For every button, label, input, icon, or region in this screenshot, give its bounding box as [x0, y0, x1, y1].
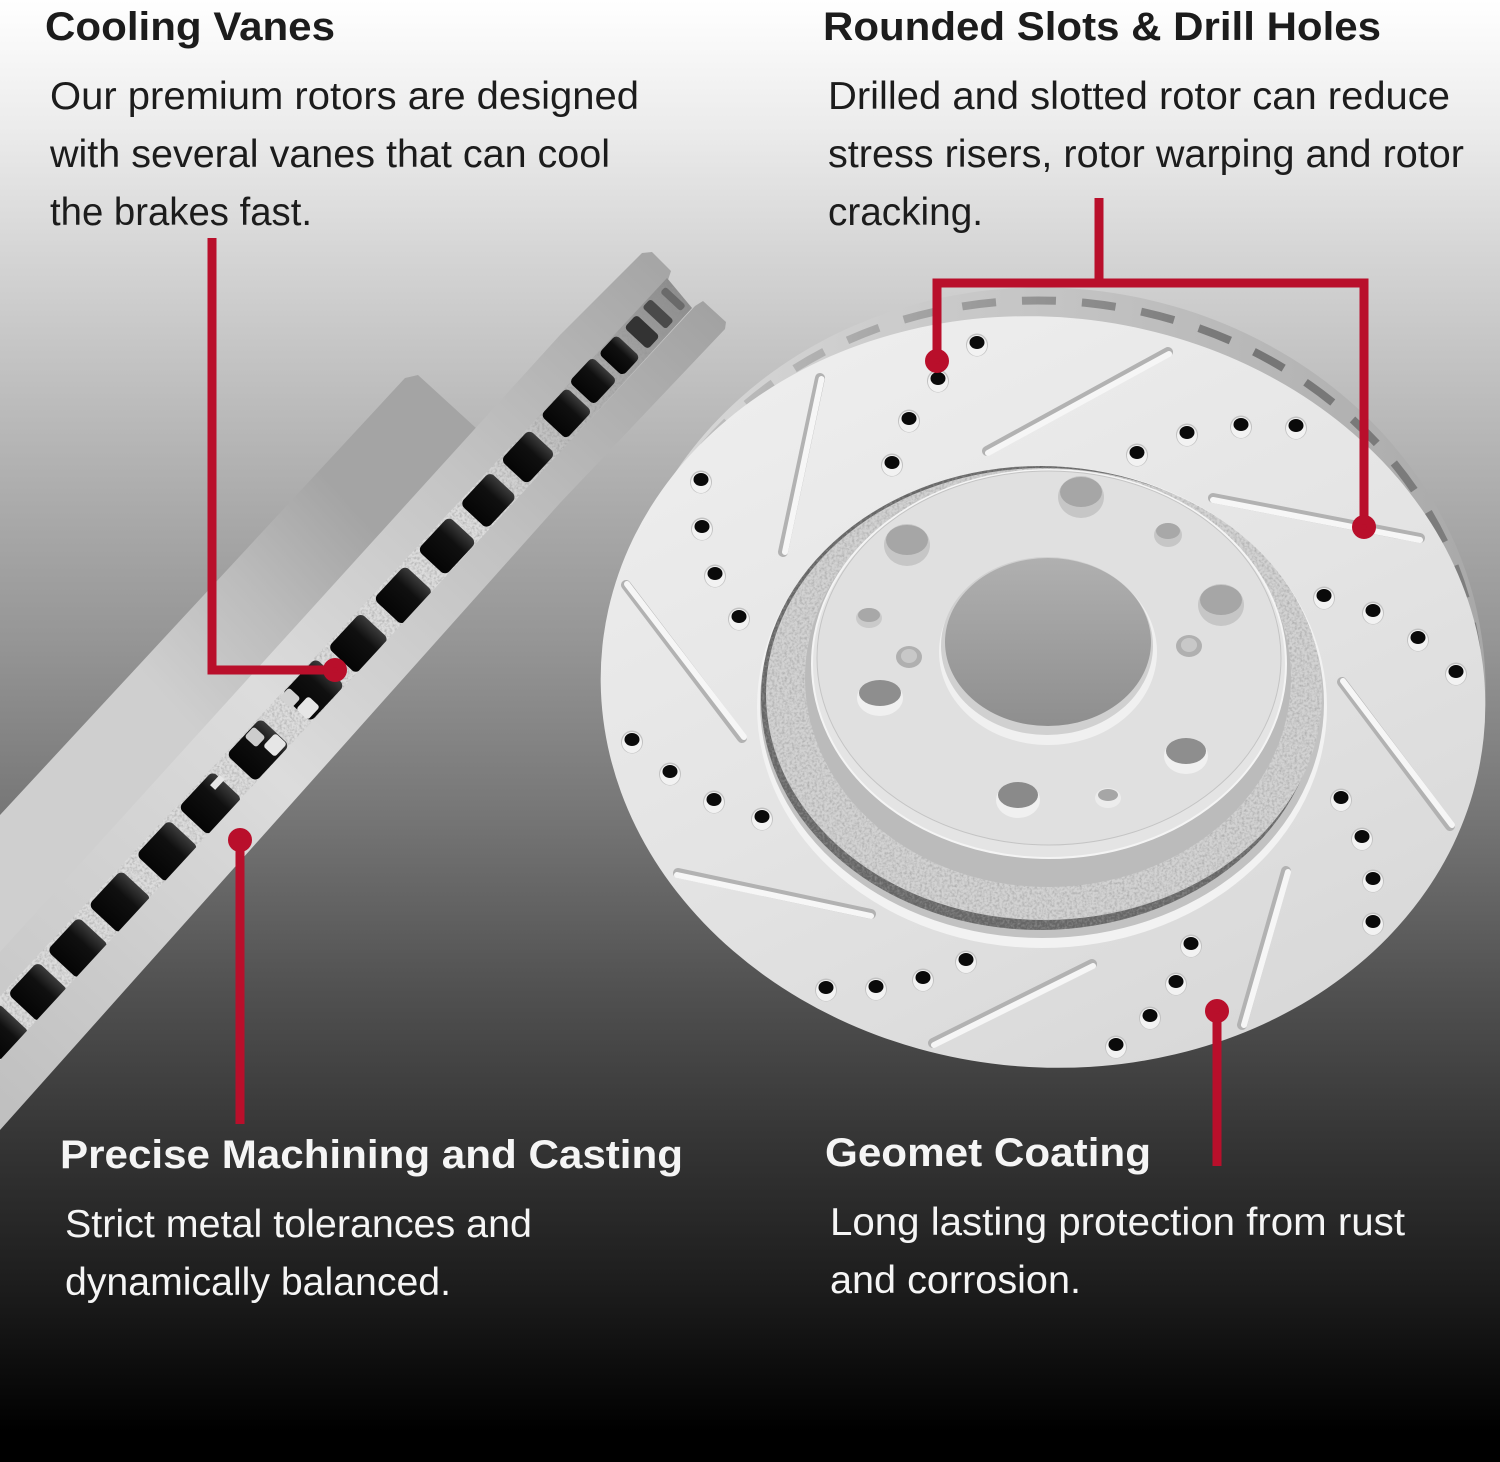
text: slots description: cracking. [828, 191, 983, 234]
cooling vents [0, 287, 686, 1062]
back plate [0, 252, 671, 1000]
left rotor: side view [0, 252, 726, 1130]
heading: geomet coating: Geomet Coating [825, 1131, 1151, 1175]
rotor outer rim [676, 288, 1486, 700]
text: machining description: Strict metal tolerances and [65, 1203, 532, 1246]
hub ring [757, 466, 1327, 948]
vent strip [0, 278, 692, 1064]
rotor hub [0, 375, 476, 960]
front plate [0, 301, 726, 1130]
text: slots description: stress risers, rotor warping and rotor [828, 133, 1464, 176]
text: slots description: Drilled and slotted rotor can reduce [828, 75, 1450, 118]
right rotor: face view [600, 288, 1486, 1068]
callout: geomet coating leader [1210, 1004, 1224, 1166]
text: machining description: dynamically balanced. [65, 1261, 451, 1304]
text: cooling vanes description: with several vanes that can cool [49, 133, 610, 176]
text: coating description: Long lasting protection from rust [830, 1201, 1405, 1244]
drilled holes [621, 334, 1467, 1058]
text: cooling vanes description [49, 75, 639, 234]
text: coating description [830, 1201, 1405, 1302]
white vane details [210, 687, 320, 790]
text: slots description [828, 75, 1464, 234]
rim vents [700, 296, 1480, 649]
text: coating description: and corrosion. [830, 1259, 1081, 1302]
slots [626, 352, 1452, 1045]
text: cooling vanes description: the brakes fast. [50, 191, 312, 234]
callout: slots and holes leader [930, 198, 1372, 534]
small studs [856, 523, 1202, 808]
rotor face [563, 273, 1500, 1111]
heading: cooling vanes: Cooling Vanes [45, 5, 335, 49]
callout: cooling vanes leader [212, 238, 342, 678]
center bore [939, 557, 1157, 745]
heading: precise machining: Precise Machining and Casting [60, 1133, 683, 1177]
callout: precise machining leader [232, 832, 248, 1124]
bolt holes [857, 476, 1244, 818]
text: machining description [65, 1203, 532, 1304]
heading: rounded slots and drill holes: Rounded Slots & Drill Holes [823, 5, 1381, 49]
text: cooling vanes description: Our premium rotors are designed [50, 75, 639, 118]
